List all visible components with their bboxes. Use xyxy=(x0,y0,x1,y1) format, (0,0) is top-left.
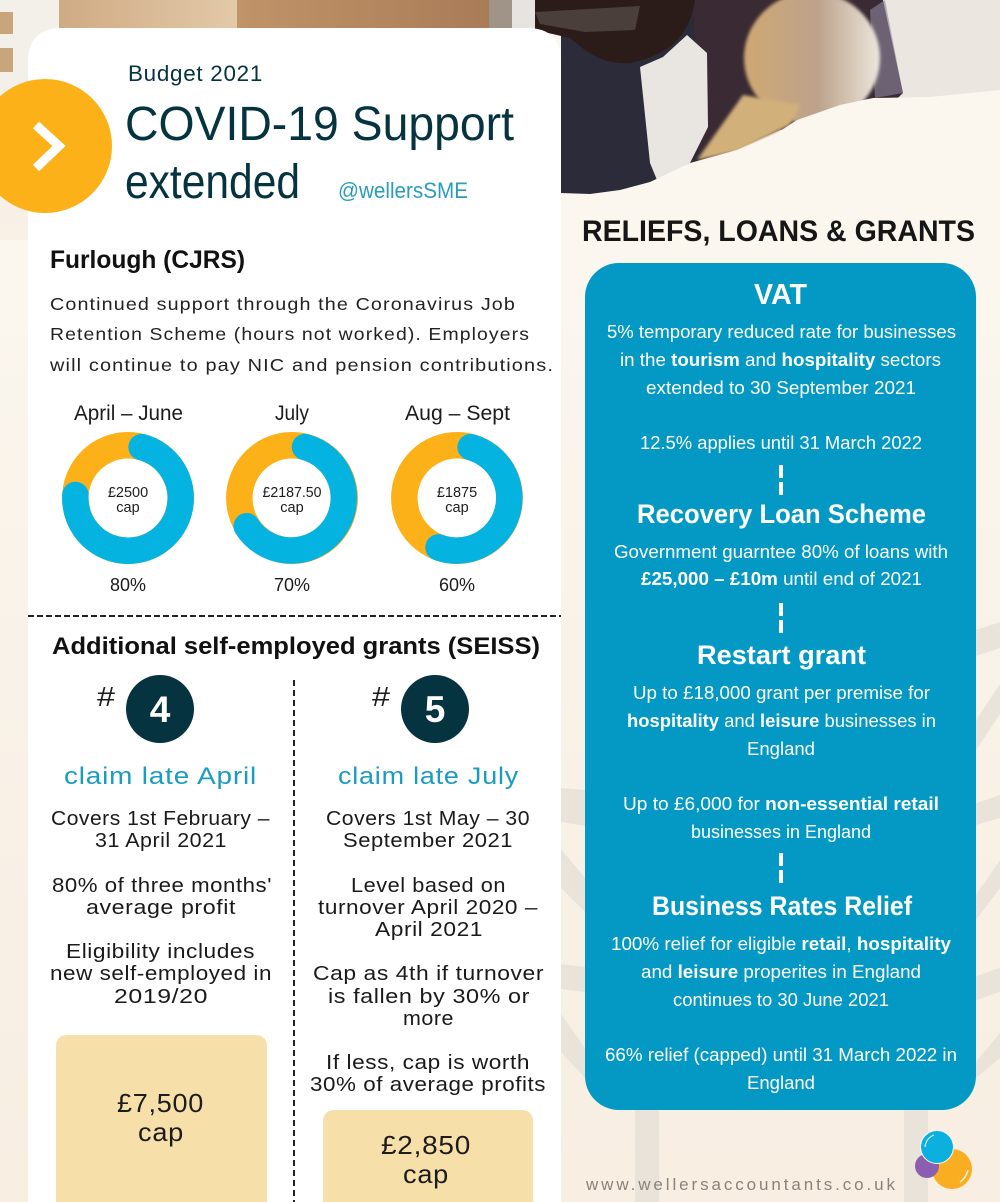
chart: April to June donut xyxy=(74,402,183,595)
grant 4 details: 80% of three months' xyxy=(52,874,272,897)
torn paper edge xyxy=(561,90,1000,290)
chart: April to June donut: 80% xyxy=(110,575,146,595)
grant 4 details: Covers 1st February – xyxy=(51,807,270,830)
grant 4 details xyxy=(50,807,272,1008)
grant 5 details: Level based on xyxy=(351,874,506,897)
section: business rates relief: 100% relief for eligible retail, hospitality xyxy=(611,933,952,954)
chart: Aug to Sept donut: Aug – Sept xyxy=(405,402,510,425)
faded background arcs and posts xyxy=(561,622,1000,1202)
section: recovery loan scheme: £25,000 – £10m until end of 2021 xyxy=(641,568,922,589)
icon: orange chevron badge xyxy=(0,79,112,213)
cap box £7,500: £7,500 xyxy=(117,1088,204,1118)
chart: April to June donut: April – June xyxy=(74,402,183,425)
badge 5: 5 xyxy=(425,689,445,730)
subtitle: Budget 2021 xyxy=(128,61,263,86)
cap box £7,500 xyxy=(56,1035,267,1202)
chart: July donut: cap xyxy=(280,500,304,516)
furlough description: will continue to pay NIC and pension contributions. xyxy=(49,355,554,375)
section: VAT xyxy=(607,279,956,453)
section: VAT: 5% temporary reduced rate for businesses xyxy=(607,321,956,342)
chart: Aug to Sept donut xyxy=(404,402,510,595)
chart: July donut xyxy=(239,402,345,595)
grant 5 details: 30% of average profits xyxy=(310,1073,546,1096)
grant 5 details: April 2021 xyxy=(375,918,483,941)
section: business rates relief: continues to 30 June 2021 xyxy=(673,989,889,1010)
furlough description xyxy=(49,294,554,375)
section: business rates relief: Business Rates Relief xyxy=(652,891,913,921)
panel: reliefs xyxy=(585,263,976,1110)
heading: SEISS: Additional self-employed grants (SEISS) xyxy=(52,633,540,660)
grant 5 details: is fallen by 30% or xyxy=(328,985,530,1008)
badge 4: 4 xyxy=(150,689,171,730)
grant 5 details: Cap as 4th if turnover xyxy=(313,962,544,985)
social handle: @wellersSME xyxy=(338,178,468,203)
section: recovery loan scheme: Recovery Loan Scheme xyxy=(637,499,926,529)
section: VAT: extended to 30 September 2021 xyxy=(646,377,916,398)
grant 4 details: Eligibility includes xyxy=(66,940,255,963)
grant 5 details: If less, cap is worth xyxy=(326,1051,530,1074)
section: restart grant xyxy=(623,640,939,842)
section: VAT: in the tourism and hospitality sectors xyxy=(620,349,941,370)
section: VAT: VAT xyxy=(754,279,807,311)
grant 4 details: new self-employed in xyxy=(50,962,272,985)
section: VAT: 12.5% applies until 31 March 2022 xyxy=(640,432,922,453)
grant 5 details: turnover April 2020 – xyxy=(318,896,538,919)
section: recovery loan scheme: Government guarntee 80% of loans with xyxy=(614,541,948,562)
section: restart grant: England xyxy=(747,738,815,759)
grant 5 details: September 2021 xyxy=(343,829,513,852)
grant 4 details: 31 April 2021 xyxy=(95,829,227,852)
chart: July donut: July xyxy=(275,402,309,425)
section: business rates relief xyxy=(605,891,957,1093)
chart: July donut: 70% xyxy=(274,575,310,595)
chart: April to June donut: £2500 xyxy=(108,485,148,501)
grant 4 details: 2019/20 xyxy=(114,985,208,1008)
section: restart grant: hospitality and leisure businesses in xyxy=(627,710,936,731)
chart: Aug to Sept donut: 60% xyxy=(439,575,475,595)
chart: July donut: £2187.50 xyxy=(262,485,322,501)
section: business rates relief: and leisure properites in England xyxy=(641,961,921,982)
heading: furlough: Furlough (CJRS) xyxy=(50,246,245,274)
title block xyxy=(125,61,514,209)
icon: company logo xyxy=(915,1130,972,1189)
section: restart grant: Up to £18,000 grant per premise for xyxy=(633,682,930,703)
column: grant 5 xyxy=(310,675,546,1202)
furlough description: Continued support through the Coronavirus Job xyxy=(50,294,516,314)
footer website: www.wellersaccountants.co.uk xyxy=(585,1175,896,1194)
column: grant 4 xyxy=(50,675,272,1202)
section: restart grant: Restart grant xyxy=(697,640,866,670)
badge 4 xyxy=(97,675,194,743)
section: recovery loan scheme xyxy=(614,499,948,589)
cap box £2,850: £2,850 xyxy=(381,1130,471,1160)
cap box £7,500: cap xyxy=(138,1117,184,1147)
panel: left white card xyxy=(28,28,561,1202)
cap box £2,850: cap xyxy=(403,1159,449,1189)
claim date 4: claim late April xyxy=(64,763,257,790)
chart: Aug to Sept donut: £1875 xyxy=(437,485,477,501)
header photo xyxy=(0,0,1000,240)
claim date 5: claim late July xyxy=(338,763,519,790)
grant 5 details: Covers 1st May – 30 xyxy=(326,807,530,830)
badge 5: # xyxy=(372,681,390,712)
chart: April to June donut: cap xyxy=(116,500,140,516)
section: business rates relief: 66% relief (capped) until 31 March 2022 in xyxy=(605,1044,957,1065)
furlough description: Retention Scheme (hours not worked). Employers xyxy=(50,324,530,344)
section: restart grant: businesses in England xyxy=(691,821,871,842)
grant 4 details: average profit xyxy=(86,896,236,919)
section: restart grant: Up to £6,000 for non-essential retail xyxy=(623,793,939,814)
grant 5 details xyxy=(310,807,546,1096)
badge 4: # xyxy=(97,681,115,712)
cap box £2,850 xyxy=(323,1110,533,1202)
section: business rates relief: England xyxy=(747,1072,815,1093)
chart: Aug to Sept donut: cap xyxy=(445,500,469,516)
badge 5 xyxy=(372,675,469,743)
heading: reliefs loans and grants: RELIEFS, LOANS & GRANTS xyxy=(582,215,975,248)
main title line 1: COVID-19 Support xyxy=(125,98,514,151)
main title line 2: extended xyxy=(125,156,300,209)
grant 5 details: more xyxy=(403,1007,454,1030)
